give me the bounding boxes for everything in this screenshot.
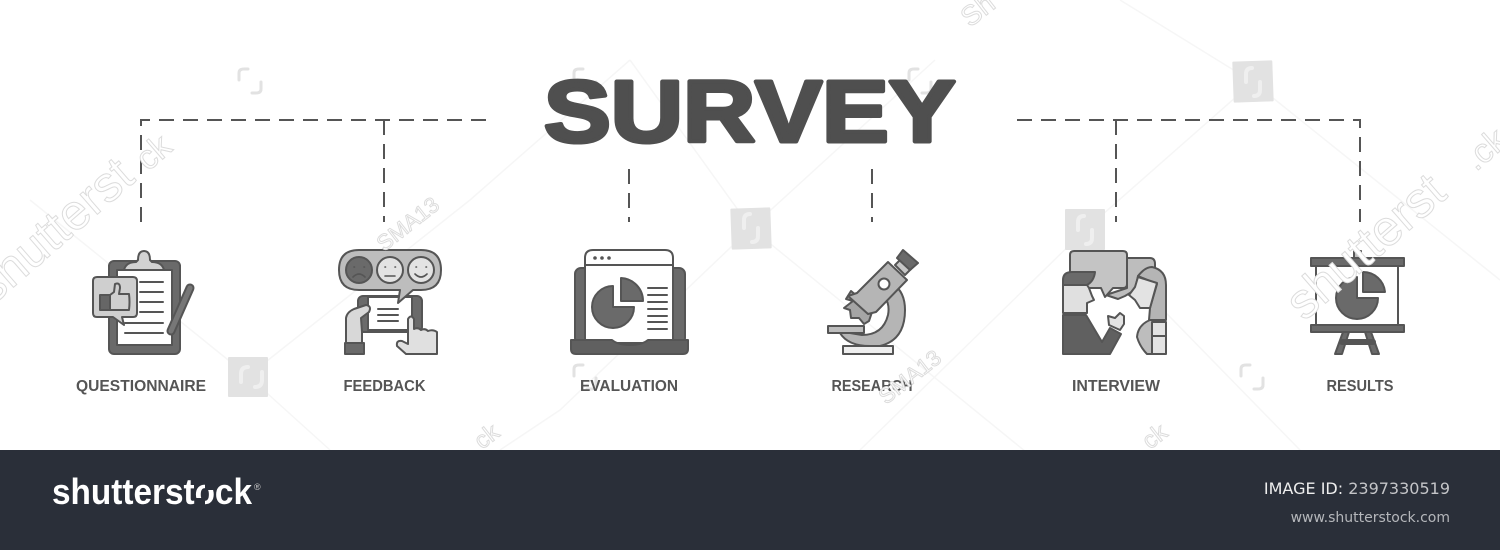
title: SURVEY [544, 63, 955, 160]
icon: microscope [828, 250, 918, 354]
footer logo gaps [195, 482, 215, 506]
icon: clipboard with thumbs up [93, 251, 190, 354]
dashed connector lines [141, 120, 1360, 222]
panel: evaluation [571, 250, 688, 395]
label: research: RESEARCH [832, 378, 912, 395]
watermark text: ck [128, 126, 180, 178]
panel: results [1311, 251, 1404, 395]
footer image id: IMAGE ID: 2397330519 [1264, 479, 1450, 498]
watermark text: SMA13 [372, 192, 444, 256]
label: feedback: FEEDBACK [344, 378, 426, 395]
label: results: RESULTS [1326, 378, 1394, 395]
watermark text: shutterst [1274, 162, 1456, 330]
label: interview: INTERVIEW [1072, 378, 1161, 395]
icon: laptop with pie chart [571, 250, 688, 354]
watermark text: SMA13 [874, 345, 946, 409]
footer bar [0, 450, 1500, 550]
watermark text: ck [469, 418, 505, 455]
label: evaluation: EVALUATION [580, 378, 678, 395]
panel: questionnaire [76, 251, 206, 395]
panel: interview [1063, 251, 1166, 395]
panel: research [828, 250, 918, 395]
panel: feedback [339, 250, 441, 395]
footer logo mark: ® [254, 482, 261, 492]
icon dots: browser window [593, 256, 611, 260]
watermark text: ck [1137, 418, 1173, 455]
icon: two people talking [1063, 251, 1166, 354]
footer url: www.shutterstock.com [1291, 510, 1450, 526]
icon: rating faces and tablet [339, 250, 441, 354]
label: questionnaire: QUESTIONNAIRE [76, 378, 206, 395]
footer logo: shutterstock [52, 471, 253, 512]
icon: presentation board with pie chart [1311, 251, 1404, 354]
watermark squares [228, 60, 1274, 397]
watermark logos [239, 68, 1263, 389]
